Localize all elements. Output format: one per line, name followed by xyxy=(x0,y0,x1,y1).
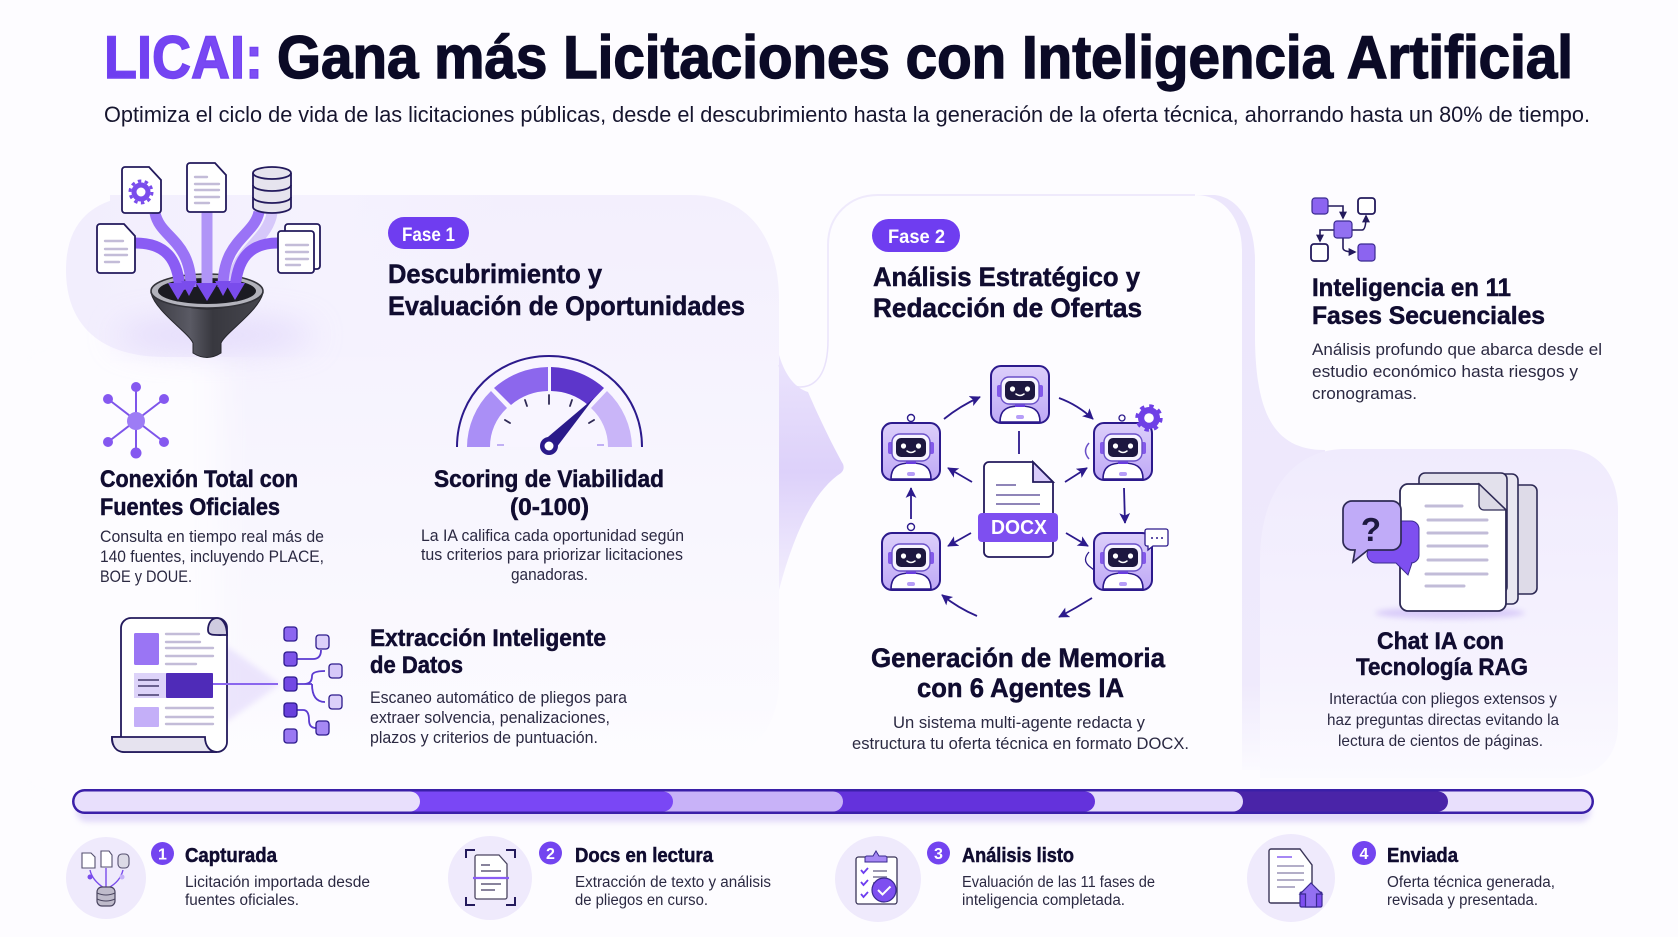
icon: scanned document xyxy=(112,618,280,752)
text: conexion total: Conexión Total con xyxy=(100,466,298,493)
panel: inteligencia 11 fases xyxy=(1311,198,1602,403)
text: inteligencia: Análisis profundo que abarca desde el xyxy=(1312,341,1602,359)
text: chat ia: Chat IA con xyxy=(1377,628,1504,655)
text: chat ia: Interactúa con pliegos extensos y xyxy=(1329,691,1557,708)
text: capturada: fuentes oficiales. xyxy=(185,892,299,909)
text: enviada: revisada y presentada. xyxy=(1387,892,1538,909)
icon: funnel with sources xyxy=(97,163,320,358)
text: capturada: Capturada xyxy=(185,844,278,867)
text: conexion total: Fuentes Oficiales xyxy=(100,494,280,521)
text: inteligencia: estudio económico hasta riesgos y xyxy=(1312,363,1579,381)
text: analisis: Análisis listo xyxy=(962,844,1074,867)
badge: fase 1 xyxy=(388,217,469,249)
badge 1: 1 xyxy=(158,846,167,864)
text: inteligencia: cronogramas. xyxy=(1312,385,1417,403)
heading: fase 1 xyxy=(388,259,745,321)
diagram: agents xyxy=(882,366,1168,617)
title: Gana más Licitaciones con Inteligencia Artificial xyxy=(277,24,1573,91)
icon: extracted data tree xyxy=(284,627,342,743)
text: generacion de memoria: estructura tu oferta técnica en formato DOCX. xyxy=(852,735,1189,753)
text: generacion de memoria: Generación de Memoria xyxy=(871,643,1166,673)
arrow: phase connector xyxy=(779,355,844,590)
badge 2: 2 xyxy=(546,846,555,863)
text: extraccion xyxy=(370,625,628,747)
icon: agent lower left xyxy=(882,524,940,590)
text: scoring: ganadoras. xyxy=(511,566,588,584)
text: extraccion: plazos y criterios de puntuación. xyxy=(370,729,598,747)
text: capturada xyxy=(185,844,370,909)
timeline progress bar xyxy=(72,789,1594,822)
icon: chat with documents xyxy=(1343,473,1537,619)
text: docs: de pliegos en curso. xyxy=(575,892,708,909)
text: scoring: La IA califica cada oportunidad según xyxy=(421,527,684,545)
text: scoring: Scoring de Viabilidad xyxy=(434,466,664,493)
heading: fase 1: Evaluación de Oportunidades xyxy=(388,291,745,321)
title: LICAI: xyxy=(104,24,263,91)
text: docs: Docs en lectura xyxy=(575,844,714,867)
icon: network hub xyxy=(103,382,169,458)
text: scoring xyxy=(421,466,684,584)
text: chat ia: lectura de cientos de páginas. xyxy=(1338,733,1543,750)
text: extraccion: Extracción Inteligente xyxy=(370,625,606,652)
text: generacion de memoria: con 6 Agentes IA xyxy=(917,673,1124,703)
text: generacion de memoria xyxy=(852,643,1189,753)
step 2: docs en lectura xyxy=(448,836,771,920)
heading: fase 2: Redacción de Ofertas xyxy=(873,293,1142,323)
text: capturada: Licitación importada desde xyxy=(185,874,370,891)
text: enviada xyxy=(1387,844,1555,909)
panel: funnel backdrop xyxy=(66,195,500,357)
text: conexion total xyxy=(100,466,324,586)
badge 3: 3 xyxy=(934,846,943,863)
icon: clipboard check xyxy=(856,851,897,904)
gauge needle xyxy=(540,398,594,455)
text: analisis xyxy=(962,844,1155,909)
text: scoring: tus criterios para priorizar licitaciones xyxy=(421,546,683,564)
icon: scan xyxy=(466,850,515,905)
step 4: enviada xyxy=(1247,834,1555,922)
chart: viability gauge xyxy=(457,356,642,455)
icon: funnel cone xyxy=(151,293,263,358)
text: docs: Extracción de texto y análisis xyxy=(575,874,771,891)
text: extraccion: de Datos xyxy=(370,652,463,679)
badge 3 xyxy=(927,842,950,864)
text: generacion de memoria: Un sistema multi-agente redacta y xyxy=(893,714,1146,732)
panel: fase 2 xyxy=(779,195,1242,775)
text: inteligencia: Fases Secuenciales xyxy=(1312,302,1545,330)
icon: capture xyxy=(82,851,129,906)
badge 1 xyxy=(151,842,174,865)
heading: fase 2 xyxy=(873,262,1142,323)
step 1: capturada xyxy=(66,837,370,919)
arrows: agent cycle xyxy=(911,397,1125,617)
heading: fase 1: Descubrimiento y xyxy=(388,259,602,289)
subtitle: Optimiza el ciclo de vida de las licitaciones públicas, desde el descubrimiento hasta la generación de la oferta técnica, ahorrando hasta un 80% de tiempo. xyxy=(104,102,1590,127)
icon: docx document: DOCX xyxy=(991,517,1048,539)
step 3: analisis listo xyxy=(835,836,1155,922)
strip: right purple band xyxy=(1190,195,1325,770)
text: chat ia: haz preguntas directas evitando la xyxy=(1327,712,1559,729)
text: inteligencia xyxy=(1312,274,1602,403)
heading: fase 2: Análisis Estratégico y xyxy=(873,262,1140,292)
panel: fase 1 xyxy=(10,163,780,805)
text: conexion total: Consulta en tiempo real más de xyxy=(100,528,324,546)
text: analisis: inteligencia completada. xyxy=(962,892,1125,909)
text: inteligencia: Inteligencia en 11 xyxy=(1312,274,1511,302)
text: chat ia xyxy=(1327,628,1559,750)
text: docs xyxy=(575,844,771,909)
icon: flow diagram xyxy=(1311,198,1375,261)
text: conexion total: 140 fuentes, incluyendo PLACE, xyxy=(100,548,324,566)
text: conexion total: BOE y DOUE. xyxy=(100,568,192,586)
text: extraccion: extraer solvencia, penalizaciones, xyxy=(370,709,610,727)
text: enviada: Enviada xyxy=(1387,844,1459,867)
icon: agent left xyxy=(882,414,940,480)
icon: agent top xyxy=(991,366,1049,423)
badge 4 xyxy=(1352,841,1376,865)
text: enviada: Oferta técnica generada, xyxy=(1387,874,1555,891)
panel: chat rag xyxy=(1260,449,1618,778)
badge 2 xyxy=(539,842,562,864)
icon: docx document xyxy=(978,462,1058,557)
icon: document upload xyxy=(1269,849,1322,907)
badge: fase 1: Fase 1 xyxy=(402,225,455,246)
badge 4: 4 xyxy=(1360,846,1369,863)
icon: agent lower right xyxy=(1086,529,1168,590)
badge: fase 2: Fase 2 xyxy=(888,227,945,248)
icon: chat with documents: ? xyxy=(1361,511,1381,548)
icon: agent right gear xyxy=(1086,406,1161,480)
text: chat ia: Tecnología RAG xyxy=(1356,654,1528,681)
text: scoring: (0-100) xyxy=(510,494,589,521)
text: analisis: Evaluación de las 11 fases de xyxy=(962,874,1155,891)
badge: fase 2 xyxy=(872,219,960,252)
text: extraccion: Escaneo automático de pliegos para xyxy=(370,689,628,707)
